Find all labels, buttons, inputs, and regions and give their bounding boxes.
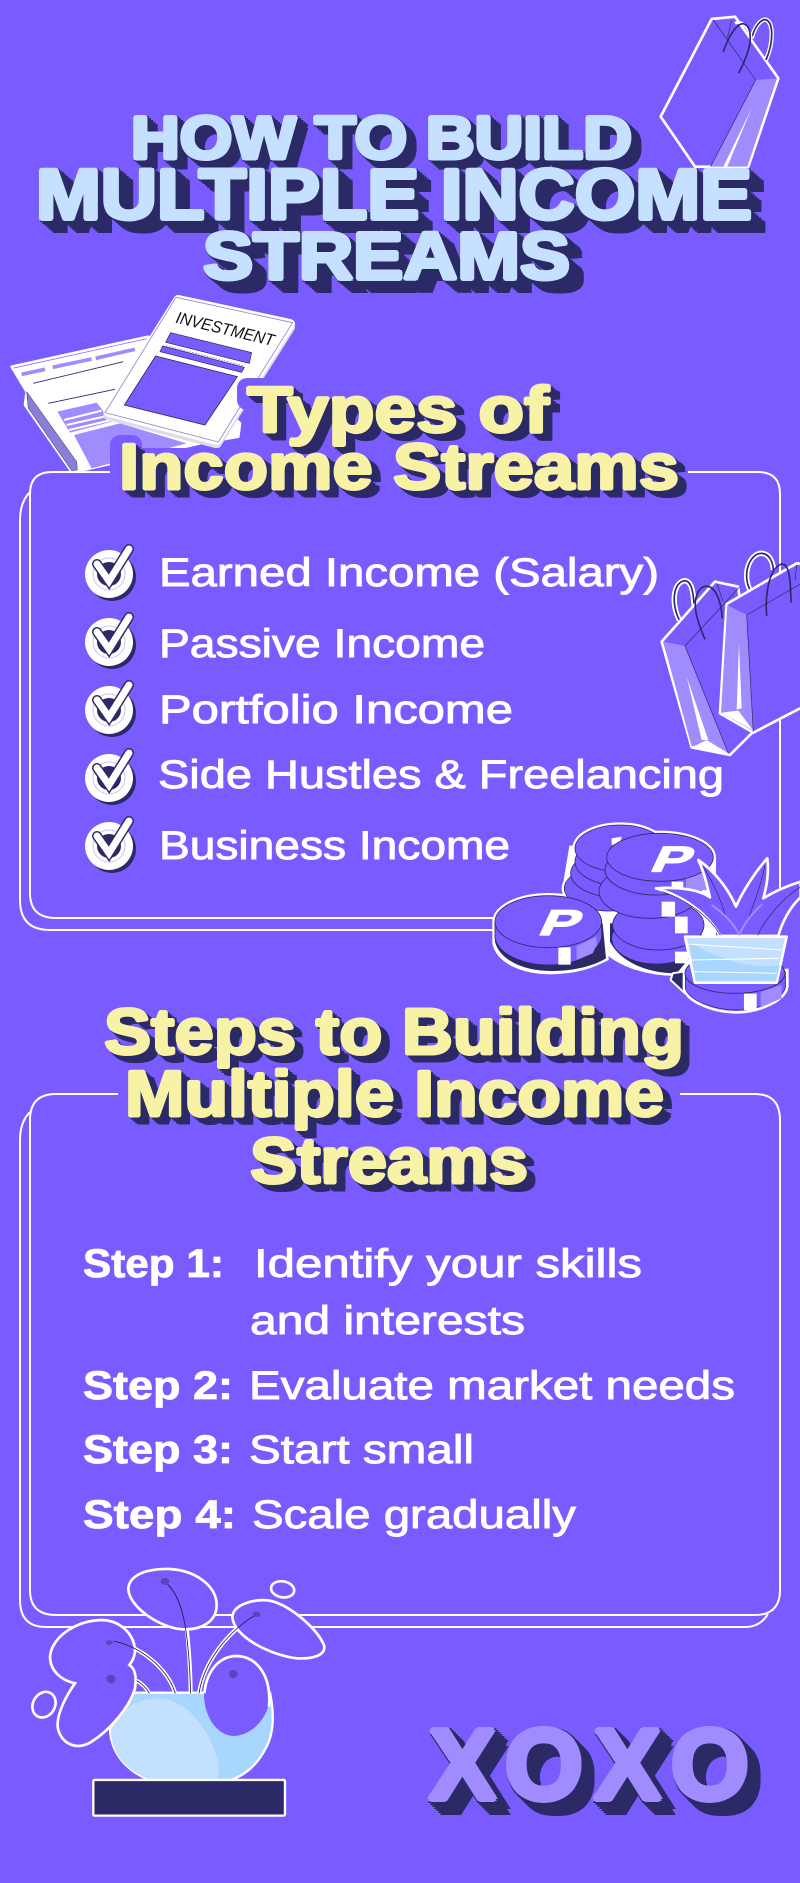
item: business income: Business Income <box>159 824 510 868</box>
title: MULTIPLE INCOME <box>36 156 752 235</box>
base <box>93 1780 285 1816</box>
heading backing: steps <box>118 1068 680 1128</box>
title: HOW TO BUILD <box>131 104 632 172</box>
leaf: top <box>128 1569 217 1629</box>
item: business income <box>85 821 510 873</box>
list: income types <box>85 549 724 873</box>
step 2 <box>83 1364 735 1408</box>
step 3 <box>83 1428 474 1472</box>
step 3: Start small <box>249 1428 474 1472</box>
icon: plant in pot bottom left <box>28 1569 324 1816</box>
step 2: Evaluate market needs <box>249 1364 735 1408</box>
icon: shopping bag top right <box>661 17 778 167</box>
plant coin <box>671 953 787 1012</box>
item: side hustles <box>85 753 724 805</box>
step 1: and interests <box>250 1299 525 1343</box>
heading: steps to building multiple income streams: Steps to Building <box>104 995 684 1068</box>
coin stack back <box>564 825 665 911</box>
panel: types of income streams frames <box>20 472 780 930</box>
step 1: Identify your skills <box>254 1242 642 1286</box>
leaf veins <box>113 1583 255 1693</box>
heading backing: types of <box>110 378 688 497</box>
heading: steps to building multiple income streams <box>104 995 684 1197</box>
back paper <box>12 337 240 472</box>
leaf spots <box>106 1578 261 1683</box>
item: earned income: Earned Income (Salary) <box>159 551 659 595</box>
icon: investment documents <box>12 297 293 472</box>
coin outline <box>495 825 713 973</box>
list: steps <box>83 1242 735 1537</box>
pot <box>685 937 787 983</box>
step 1 <box>83 1242 642 1343</box>
leaf: left <box>50 1620 136 1746</box>
pot body <box>110 1693 273 1781</box>
item: portfolio income: Portfolio Income <box>159 688 513 732</box>
item: passive income: Passive Income <box>159 622 485 666</box>
item: side hustles: Side Hustles & Freelancing <box>158 753 724 797</box>
item: earned income <box>85 549 659 601</box>
leaf: middle <box>204 1656 270 1736</box>
title: STREAMS <box>203 219 570 294</box>
leaf: right <box>232 1600 324 1658</box>
leaves <box>656 858 800 936</box>
stems <box>113 1615 255 1693</box>
heading: types of income streams: Income Streams <box>119 430 679 503</box>
front document <box>105 297 293 443</box>
coin stack front <box>599 833 713 973</box>
icon: coin stacks with plant <box>495 825 800 1012</box>
step 1: Step 1: <box>83 1242 224 1286</box>
text: coin letter: P <box>533 903 590 943</box>
title <box>36 104 752 294</box>
step 2: Step 2: <box>83 1364 233 1408</box>
step 4: Scale gradually <box>252 1493 576 1537</box>
step 3: Step 3: <box>83 1428 233 1472</box>
step 4 <box>83 1493 576 1537</box>
step 4: Step 4: <box>83 1493 236 1537</box>
text: investment label: INVESTMENT <box>174 308 278 350</box>
panel: steps frames <box>20 1094 780 1627</box>
icon: shopping bags right <box>662 553 800 755</box>
item: passive income <box>85 617 485 669</box>
text: coin letter: P <box>645 840 702 880</box>
small leaves <box>28 1579 296 1722</box>
heading: steps to building multiple income streams: Multiple Income <box>125 1057 664 1130</box>
heading: types of income streams: Types of <box>247 373 549 446</box>
left bag <box>662 581 753 755</box>
heading: types of income streams <box>119 373 679 503</box>
coin left <box>495 896 606 971</box>
logo: xoxo: XOXO <box>429 1709 749 1821</box>
right bag <box>720 553 800 733</box>
item: portfolio income <box>85 685 513 737</box>
heading: steps to building multiple income streams: Streams <box>250 1124 528 1197</box>
